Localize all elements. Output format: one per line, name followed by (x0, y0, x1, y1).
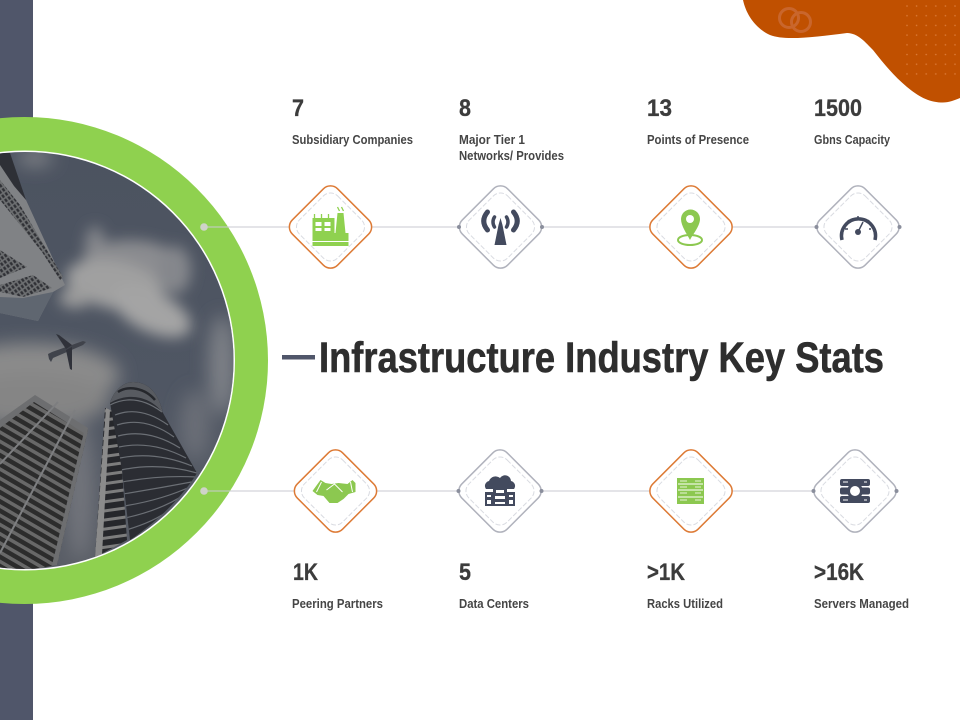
icon: location pin in orange diamond (646, 182, 736, 272)
stat: points of presence (647, 95, 749, 147)
stat: data centers: 5 (459, 559, 471, 586)
stat: servers managed: >16K (814, 559, 864, 586)
connector dots (200, 223, 208, 495)
icon: speedometer in grey diamond (813, 182, 903, 272)
icon: server management gear in grey diamond (810, 446, 900, 536)
stat: tier 1 networks: Networks/ Provides (459, 149, 564, 163)
icon: factory in orange diamond (285, 182, 376, 272)
icon: antenna in grey diamond (455, 182, 546, 272)
stat: subsidiary companies: 7 (292, 95, 304, 122)
stat: peering partners: 1K (293, 559, 318, 586)
lower-left building (0, 395, 88, 575)
icon: handshake in orange diamond (290, 446, 381, 536)
stat: racks utilized: >1K (647, 559, 685, 586)
left sidebar (0, 0, 33, 720)
connector lines (204, 227, 858, 491)
decorative orange blob (743, 0, 960, 103)
stat: capacity: Gbns Capacity (814, 133, 890, 147)
stat: data centers: Data Centers (459, 597, 529, 611)
stat: servers managed: Servers Managed (814, 597, 909, 611)
stat: points of presence: Points of Presence (647, 133, 749, 147)
stat: subsidiary companies (292, 95, 413, 147)
stat: tier 1 networks: 8 (459, 95, 471, 122)
stat: points of presence: 13 (647, 95, 672, 122)
green ring (0, 117, 268, 604)
stat: peering partners: Peering Partners (292, 597, 383, 611)
stat: subsidiary companies: Subsidiary Companies (292, 133, 413, 147)
icon: server rack in orange diamond (646, 446, 736, 536)
white ring edge (0, 150, 235, 570)
airplane (48, 334, 86, 370)
top-left building (0, 153, 65, 321)
stat: servers managed (814, 559, 909, 611)
stat: data centers (459, 559, 529, 611)
stat: capacity: 1500 (814, 95, 862, 122)
stat: racks utilized: Racks Utilized (647, 597, 723, 611)
stat: capacity (814, 95, 890, 147)
stat: peering partners (292, 559, 383, 611)
icon: cloud data center in grey diamond (455, 446, 545, 536)
stat: tier 1 networks (459, 95, 564, 163)
stat: tier 1 networks: Major Tier 1 (459, 133, 525, 147)
slab building (95, 408, 127, 557)
stat: racks utilized (647, 559, 723, 611)
round tower (110, 382, 196, 540)
photo: skyscrapers and airplane (0, 150, 240, 575)
